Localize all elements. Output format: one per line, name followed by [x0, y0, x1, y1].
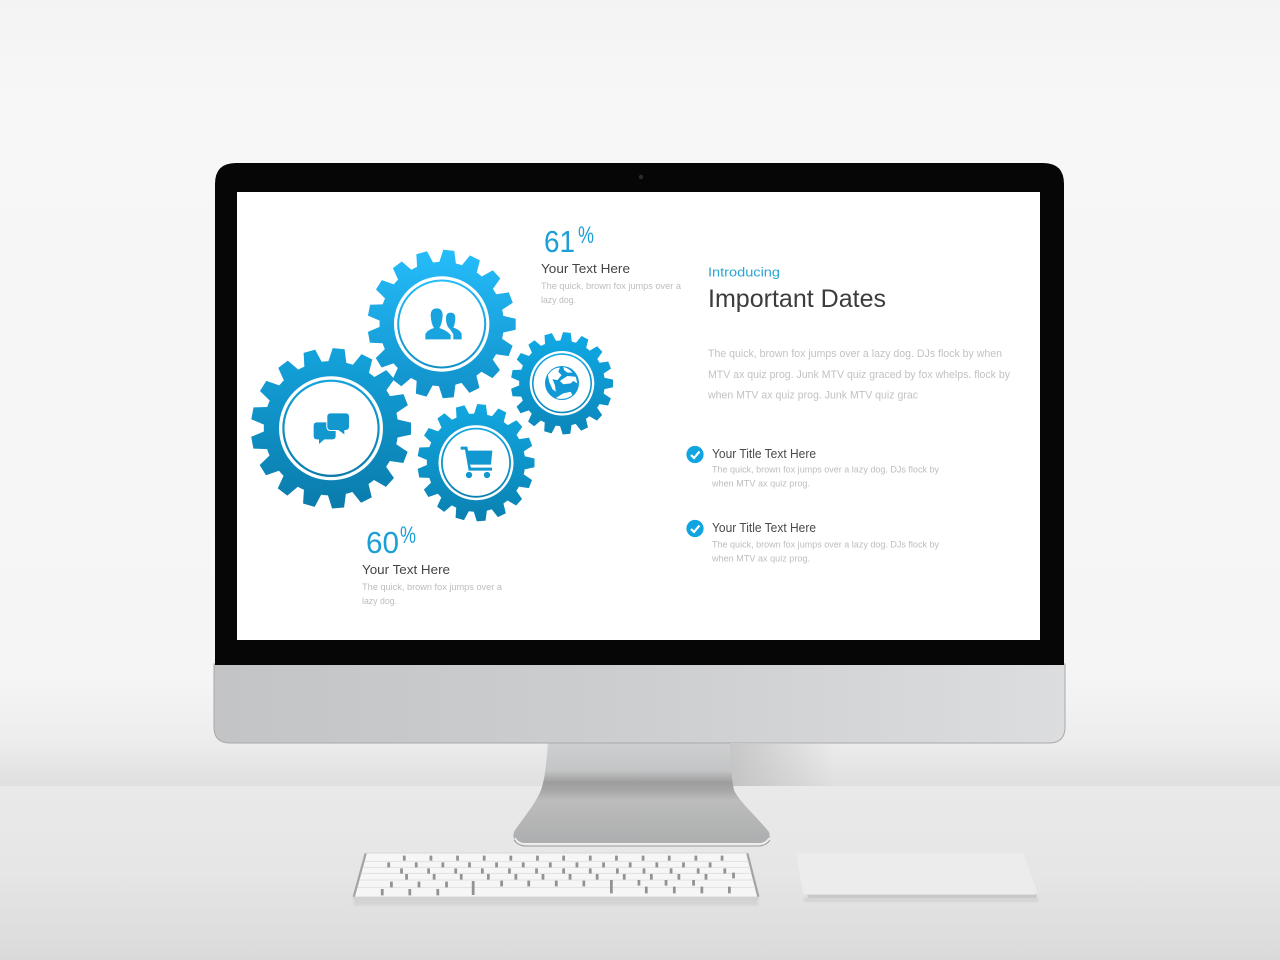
- gear: globe: [510, 331, 614, 435]
- list item 1: The quick, brown fox jumps over a lazy dog. DJs flock by: [712, 465, 939, 475]
- icon: globe: [545, 366, 579, 400]
- list item 2: Your Title Text Here: [712, 521, 816, 535]
- list item 2: when MTV ax quiz prog.: [711, 554, 810, 564]
- intro paragraph: when MTV ax quiz prog. Junk MTV quiz grac: [707, 390, 918, 402]
- gear: people: [366, 249, 517, 399]
- list item 2: [686, 520, 939, 564]
- heading: Important Dates: [708, 285, 886, 313]
- intro paragraph: MTV ax quiz prog. Junk MTV quiz graced by fox whelps. flock by: [708, 369, 1010, 381]
- list item 1: Your Title Text Here: [712, 447, 816, 461]
- stat: 60%: 60: [366, 525, 399, 560]
- intro paragraph: [707, 348, 1010, 402]
- icon: people: [425, 308, 462, 339]
- slide screen: [237, 192, 1040, 640]
- stat: 61%: Your Text Here: [541, 261, 630, 276]
- stat: 61%: The quick, brown fox jumps over a: [541, 281, 681, 291]
- list item 2: The quick, brown fox jumps over a lazy dog. DJs flock by: [712, 539, 939, 549]
- list item 1: when MTV ax quiz prog.: [711, 479, 810, 489]
- stat: 61%: %: [578, 222, 594, 249]
- trackpad: [796, 853, 1038, 902]
- stat: 61%: [541, 222, 681, 305]
- icon: check: [686, 446, 704, 463]
- heading: Introducing: [708, 264, 780, 280]
- heading: [708, 264, 886, 313]
- icon: chat bubbles: [314, 413, 349, 444]
- icon: shopping cart: [461, 447, 492, 478]
- stat: 60%: [362, 522, 502, 606]
- stat: 61%: lazy dog.: [541, 295, 576, 305]
- stat: 60%: %: [400, 522, 416, 549]
- gear: chat: [249, 347, 413, 510]
- monitor body: [214, 163, 1065, 743]
- stat: 61%: 61: [544, 224, 575, 259]
- keyboard: [353, 853, 759, 905]
- list item 1: [686, 446, 939, 489]
- gear: cart: [416, 403, 536, 522]
- webcam: [639, 175, 643, 179]
- intro paragraph: The quick, brown fox jumps over a lazy dog. DJs flock by when: [708, 348, 1002, 360]
- stat: 60%: lazy dog.: [362, 596, 397, 606]
- monitor chin: [214, 664, 1065, 743]
- stat: 60%: Your Text Here: [362, 562, 450, 577]
- monitor bezel: [215, 163, 1064, 665]
- stat: 60%: The quick, brown fox jumps over a: [362, 582, 502, 592]
- monitor stand: [513, 742, 770, 846]
- icon: check: [686, 520, 704, 537]
